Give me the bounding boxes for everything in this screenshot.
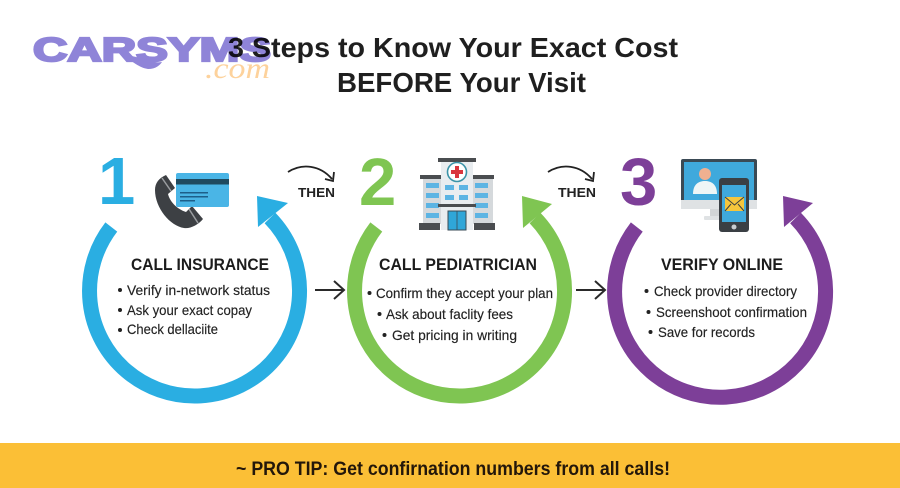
step number 1: 1 (98, 144, 135, 219)
step number 2: 2 (359, 145, 396, 220)
checklist (644, 283, 807, 340)
panel: step 3 verify online (615, 145, 826, 397)
heading: VERIFY ONLINE (661, 256, 783, 274)
pro tip banner (0, 443, 900, 488)
checklist: Ask about faclity fees (386, 306, 513, 322)
pro tip text: ~ PRO TIP: Get confirnation numbers from all calls! (236, 458, 670, 480)
checklist: Confirm they accept your plan (376, 285, 553, 301)
step number 3: 3 (620, 145, 657, 220)
circular arrow purple (615, 196, 826, 397)
circular arrow green (355, 196, 565, 396)
checklist: Save for records (658, 324, 755, 340)
icon: phone and card (155, 173, 229, 228)
icon: hospital (419, 158, 495, 230)
watermark logo (33, 31, 271, 85)
arrow: then 1 (288, 167, 335, 200)
title: BEFORE Your Visit (337, 67, 586, 98)
checklist: Check provider directory (654, 283, 797, 299)
checklist (368, 285, 553, 343)
checklist: Check dellaciite (127, 321, 218, 337)
arrow: step 1 to step 2 (315, 281, 344, 299)
checklist: Verify in-network status (127, 282, 270, 298)
arrow: step 2 to step 3 (576, 281, 605, 299)
checklist: Screenshoot confirmation (656, 304, 807, 320)
title (228, 32, 678, 98)
watermark logo: .com (205, 52, 270, 85)
icon: monitor and phone (681, 159, 757, 232)
arrow: then 2: THEN (558, 185, 596, 200)
arrow: then 1: THEN (298, 185, 335, 200)
watermark logo: CARSYMS (33, 31, 271, 68)
checklist: Ask your exact copay (127, 302, 252, 318)
title: 3 Steps to Know Your Exact Cost (228, 32, 678, 63)
circular arrow blue (90, 196, 300, 396)
checklist: Get pricing in writing (392, 327, 517, 343)
panel: step 2 call pediatrician (355, 145, 565, 396)
heading: CALL INSURANCE (131, 256, 269, 274)
checklist (118, 282, 270, 337)
panel: step 1 call insurance (90, 144, 300, 396)
arrow: then 2 (548, 167, 596, 200)
heading: CALL PEDIATRICIAN (379, 256, 537, 274)
